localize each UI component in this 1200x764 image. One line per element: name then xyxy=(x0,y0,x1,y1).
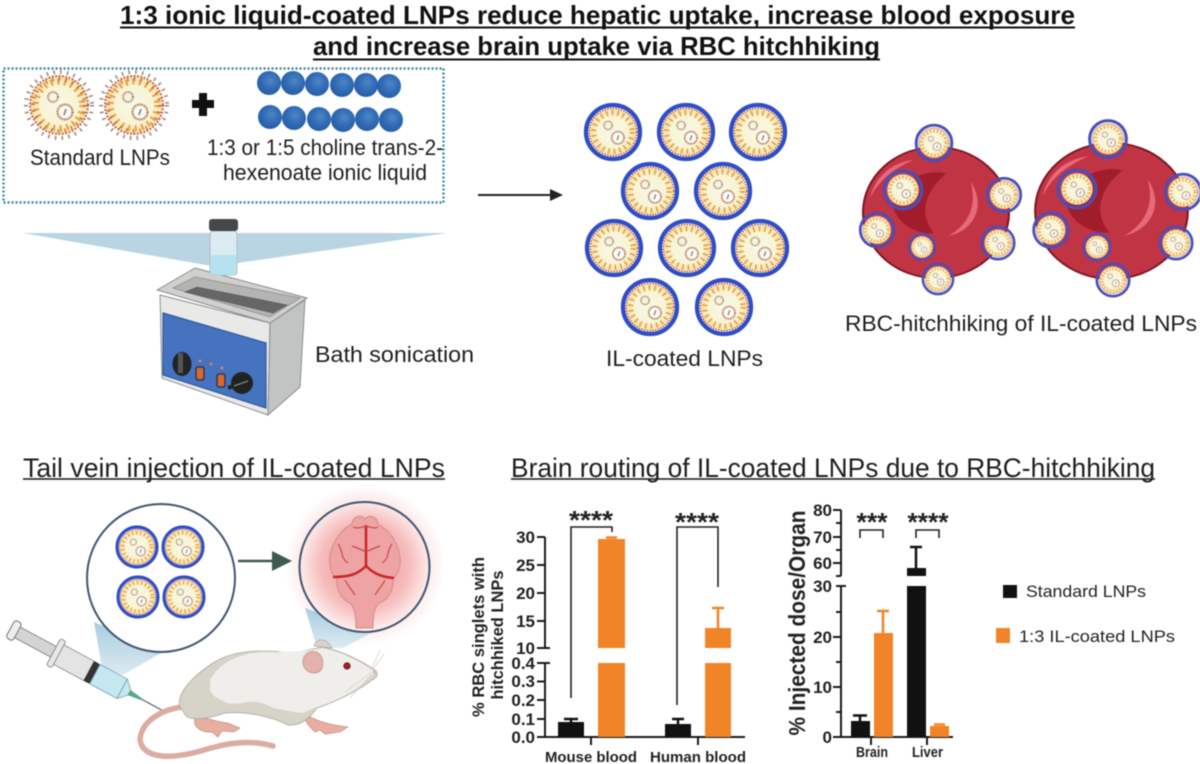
y axis title: % Injected dose/Organ xyxy=(784,510,810,736)
panel: formulation ingredients xyxy=(4,68,444,202)
legend swatch: standard xyxy=(1003,585,1017,598)
label: ionic liquid: hexenoate ionic liquid xyxy=(223,160,427,185)
callout: syringe wedge xyxy=(94,622,163,675)
y tick labels xyxy=(813,501,832,747)
panel: RBC hitchhiking xyxy=(845,121,1200,336)
bars: human blood xyxy=(665,608,731,737)
y tick labels: 0.3 xyxy=(511,672,535,691)
icon: syringe xyxy=(3,615,172,725)
large ear xyxy=(303,651,323,673)
y tick labels: 20 xyxy=(516,584,535,603)
inset: brain circle xyxy=(300,502,430,632)
icon: vial xyxy=(209,219,238,275)
y tick labels: 25 xyxy=(516,556,535,575)
tail xyxy=(140,707,273,756)
significance stars xyxy=(569,505,720,537)
icon: sonicator bath xyxy=(157,268,307,415)
nose xyxy=(373,670,377,674)
legend label: coated: 1:3 IL-coated LNPs xyxy=(1019,627,1175,646)
y axis title: % RBC singlets with xyxy=(469,557,488,717)
y tick labels: 60 xyxy=(813,554,832,573)
y axis and ticks xyxy=(537,537,745,745)
y tick labels: 70 xyxy=(813,528,832,547)
title xyxy=(120,0,1075,61)
x axis labels: Liver xyxy=(912,744,943,761)
label: RBC hitchhiking: RBC-hitchhiking of IL-coated LNPs xyxy=(845,311,1197,336)
bars: liver xyxy=(907,547,949,737)
icon: buttons xyxy=(196,367,225,387)
body xyxy=(179,647,377,725)
title: 1:3 ionic liquid-coated LNPs reduce hepatic uptake, increase blood exposure xyxy=(120,0,1075,30)
icon: brain xyxy=(330,516,400,628)
heading: brain routing: Brain routing of IL-coated LNPs due to RBC-hitchhiking xyxy=(511,453,1155,483)
panel: injection illustration xyxy=(3,485,445,756)
y tick labels: 20 xyxy=(813,628,832,647)
body highlight xyxy=(210,648,375,713)
icon: standard LNP left xyxy=(26,72,92,138)
significance stars: **** xyxy=(908,507,949,537)
label: IL-coated LNPs: IL-coated LNPs xyxy=(606,346,763,371)
small ear xyxy=(314,640,332,648)
significance stars: **** xyxy=(569,505,614,535)
significance stars xyxy=(856,507,949,537)
y axis and ticks xyxy=(833,510,953,745)
significance stars: **** xyxy=(675,507,720,537)
brain glow halo xyxy=(285,485,445,645)
y tick labels: 0 xyxy=(823,728,832,747)
label: bath sonication: Bath sonication xyxy=(315,342,474,367)
bars: mouse blood xyxy=(558,538,625,737)
legend label: standard: Standard LNPs xyxy=(1026,582,1146,601)
icon: ionic liquid spheres xyxy=(257,71,403,132)
icon: left knob xyxy=(172,352,192,376)
y tick labels: 0.4 xyxy=(511,654,536,673)
label: ionic liquid: 1:3 or 1:5 choline trans-2- xyxy=(207,135,443,160)
significance brackets xyxy=(571,527,718,705)
y tick labels: 0.0 xyxy=(511,728,535,747)
x axis labels xyxy=(856,744,943,761)
y tick labels: 0.1 xyxy=(511,710,535,729)
title: and increase brain uptake via RBC hitchhiking xyxy=(313,31,880,61)
icon: red blood cell left xyxy=(860,125,1021,294)
icon: indicator lights xyxy=(198,360,224,370)
label: standard LNPs: Standard LNPs xyxy=(30,145,170,170)
y tick labels: 80 xyxy=(813,501,832,520)
y tick labels: 30 xyxy=(516,528,535,547)
inset: coated LNPs circle xyxy=(87,504,235,652)
significance stars: *** xyxy=(856,507,888,537)
callout: brain wedge xyxy=(305,608,373,648)
bars: brain xyxy=(851,611,893,737)
significance brackets xyxy=(860,530,939,538)
heading: tail vein injection: Tail vein injection of IL-coated LNPs xyxy=(23,453,445,483)
chart: RBC singlets with hitchhiked LNPs xyxy=(469,505,746,764)
x axis labels: Brain xyxy=(856,744,888,761)
y tick labels: 15 xyxy=(516,612,535,631)
eye xyxy=(344,663,350,669)
y tick labels: 10 xyxy=(516,639,535,658)
y tick labels: 30 xyxy=(813,577,832,596)
y tick labels xyxy=(511,528,536,747)
legend swatch: coated xyxy=(996,628,1010,643)
front leg xyxy=(305,714,348,734)
icon: plus sign xyxy=(192,93,214,116)
arrow: inset to brain xyxy=(238,551,292,571)
callout: vial zoom wedge xyxy=(23,233,447,268)
icon: standard LNP right xyxy=(101,72,167,138)
icon: mouse xyxy=(140,640,384,756)
whiskers xyxy=(345,650,384,698)
icon: red blood cell right xyxy=(1034,121,1200,296)
y axis title second line: hitchhiked LNPs xyxy=(488,570,507,700)
y tick labels: 10 xyxy=(813,678,832,697)
arrow: to coated LNPs xyxy=(478,189,563,201)
y tick labels: 0.2 xyxy=(511,691,535,710)
hind leg xyxy=(194,718,240,737)
legend xyxy=(996,582,1175,646)
panel: IL-coated LNPs xyxy=(586,105,787,371)
chart: injected dose per organ xyxy=(784,501,953,761)
x axis labels xyxy=(545,749,746,764)
icon: right knob xyxy=(228,372,253,394)
